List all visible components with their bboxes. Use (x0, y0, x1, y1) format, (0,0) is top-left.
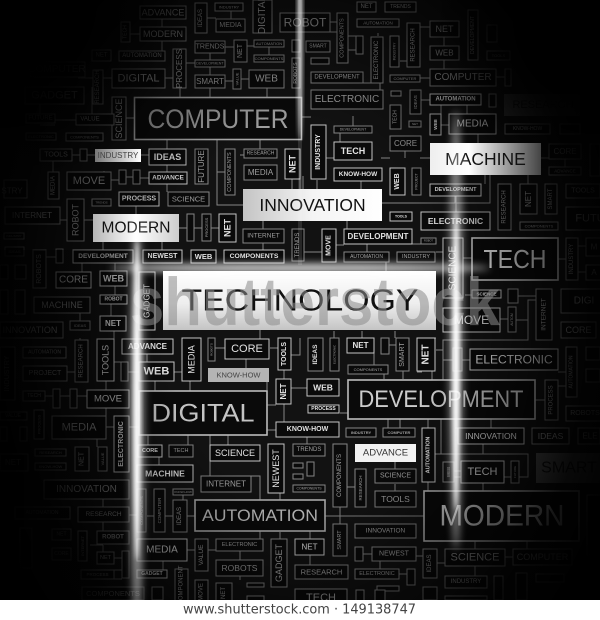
word tiles: small words: TECH (27, 393, 41, 399)
word tiles: bright bold words: WEB (103, 274, 124, 284)
word tiles: bright bold words: ADVANCE (128, 342, 168, 351)
filled box: SMART (536, 453, 600, 483)
word tiles: small words: NET (412, 122, 418, 126)
heading box: TECH: TECH (484, 244, 546, 274)
word tiles: small words: TECH (306, 592, 336, 604)
word tiles: small words: NET (5, 458, 21, 467)
word tiles: bright bold words: MEDIA (457, 118, 489, 130)
word tiles: bright bold words: WEB (195, 252, 213, 261)
word tiles: small words: ELECTRONIC (359, 571, 395, 577)
word tiles: small words: AUTOM (510, 313, 514, 326)
word tiles: small words: COMPUTER (434, 72, 492, 83)
highlighted tile: INDUSTRY (95, 149, 141, 162)
word tiles: small words: RESEARCH (502, 190, 508, 224)
word tiles: small words: ROBOT (70, 204, 80, 236)
word tiles: bright bold words: NET (222, 218, 232, 237)
light streak: center top (298, 0, 302, 265)
heading box: AUTOMATION (195, 500, 325, 531)
word tiles: small words: ROBOTS (570, 410, 600, 417)
word tiles: bright bold words: AUTOMATION (435, 96, 476, 102)
word tiles: bright bold words: MOVE (326, 235, 332, 256)
word tiles: small words: NET (436, 24, 454, 34)
word tiles: small words: AUTOMATION (568, 355, 574, 388)
word tiles: small words: RESEARCH (85, 511, 122, 518)
word tiles: bright bold words: MEDIA (146, 544, 178, 556)
heading box: COMPUTER: COMPUTER (148, 104, 288, 134)
word tiles: small words: INNOVATION (3, 325, 57, 335)
word tiles: bright bold words: DEVELOPMENT (78, 253, 128, 260)
word tiles: small words: MEDIA (62, 422, 97, 434)
word tiles: small words: FUTURE (28, 116, 53, 122)
word tiles: bright bold words: NET (302, 542, 318, 552)
word tiles: small words: INDUSTRY (4, 355, 11, 391)
word tiles: small words: IDEAS (198, 9, 204, 27)
word tiles: small words: A (591, 268, 597, 277)
word tiles: small words: SCIENCE (451, 552, 499, 564)
word tiles: small words: CORE (54, 551, 69, 557)
word tiles: small words: AUTOMATION (256, 41, 282, 46)
word tiles: small words: RESEARCH (358, 475, 363, 501)
word tiles: bright bold words: NEWEST (148, 253, 178, 260)
word tiles: small words: KNOW-HOW (39, 464, 62, 469)
word tiles: small words: PROJECT (29, 370, 62, 377)
word tiles: small words: SMART (337, 530, 343, 550)
word tiles: small words: ADVANCE (554, 168, 576, 174)
word tiles: small words: NET (100, 555, 112, 561)
word tiles: small words: VALUE (5, 413, 22, 419)
word tiles: bright bold words: TECH (341, 146, 365, 156)
word tiles: small words: NET (78, 451, 86, 466)
word tiles: bright bold words: TECH (468, 466, 498, 478)
word tiles: small words: COMPUTER (388, 430, 411, 435)
word tiles: small words: COMPONENTS (139, 496, 144, 525)
word tiles: bright bold words: DEVELOPMENT (435, 187, 477, 193)
word tiles: small words: ROBOT (284, 16, 327, 30)
word tiles: small words: SCIENCE (172, 194, 205, 204)
glow above title tile (110, 264, 490, 272)
word tiles: small words: ROBOTS (210, 343, 214, 356)
word tiles: small words: ADVANCE (142, 8, 184, 18)
word tiles: bright bold words: AUTOMATION (426, 437, 432, 473)
word tiles: small words: VALUE (100, 452, 105, 465)
highlighted tile: KNOW-HOW: KNOW-HOW (216, 370, 261, 380)
stock id caption: www.shutterstock.com · 149138747 (183, 602, 416, 618)
word tiles: small words: TRENDS (95, 200, 108, 204)
word tiles: bright bold words: PROCESS (311, 406, 336, 412)
word tiles: bright bold words: NET (279, 383, 288, 400)
word tiles: bright bold words: MOVE (94, 394, 122, 404)
word tiles: small words: NET (524, 191, 533, 207)
word tiles: bright bold words: SCIENCE (215, 448, 255, 458)
word tiles: small words: COMPONENTS (70, 134, 99, 140)
word tiles: bright bold words: NET (352, 341, 369, 350)
word tiles: small words: COMPONENTS (354, 367, 383, 372)
word tiles: bright bold words: ADVANCE (152, 174, 184, 182)
word tiles: small words: CORE (394, 139, 417, 148)
word tiles: small words: WEB (446, 467, 451, 477)
word tiles: small words: TECH (174, 448, 189, 454)
word tiles: small words: SCIENCE (114, 98, 124, 139)
word tiles: small words: COMPONENTS (255, 56, 284, 61)
highlighted tile: INDUSTRY: INDUSTRY (98, 151, 139, 160)
word tiles: small words: GADGET (31, 90, 78, 102)
word tiles: small words: VALUE (234, 72, 240, 85)
word tiles: small words: DIGI (574, 296, 594, 306)
word tiles: small words: INTERNET (206, 480, 246, 488)
word tiles: bright bold words: NET (105, 319, 121, 328)
heading box: DEVELOPMENT: DEVELOPMENT (358, 386, 524, 413)
word tiles: small words: IDEAS (177, 507, 183, 525)
word tiles: bright bold words: GADGET (141, 571, 163, 577)
word tiles: bright bold words: TOOLS (100, 345, 110, 375)
word tiles: small words: TOOLS (44, 152, 68, 158)
word tiles: small words: COMPONENTS (227, 152, 233, 192)
word tiles: small words: VALUE (80, 116, 100, 122)
word tiles: small words: AUTOMATION (350, 254, 383, 260)
heading box: COMPUTER (134, 98, 302, 140)
word tiles: small words: PROCESS (548, 385, 554, 415)
word tiles: small words: TRENDS (295, 233, 301, 257)
word tiles: small words: NET (96, 52, 108, 58)
word tiles: bright bold words: NEWEST (271, 449, 281, 488)
word tiles: small words: DEVELOPMENT (314, 74, 360, 80)
word tiles: small words: RESEARCH (95, 70, 101, 104)
word tiles: small words: IDEAS (427, 554, 433, 573)
word tiles: small words: SMART (196, 77, 224, 86)
word tiles: small words: COMPUTER (517, 552, 569, 562)
word tiles: bright bold words: SCIENCE (448, 245, 458, 290)
word tiles: small words: TRENDS (390, 4, 411, 10)
word tiles: bright bold words: PROCESS (122, 196, 156, 202)
word tiles: small words: INDUSTRY (402, 254, 430, 260)
word tiles: small words: RESEARCH (78, 344, 84, 378)
word tiles: small words: COMPONENTS (337, 454, 343, 497)
word tiles: bright bold words: ELECTRONIC (428, 216, 483, 226)
light streak: left (130, 220, 144, 620)
word tiles: bright bold words: KNOW-HOW (287, 426, 329, 433)
word tiles: small words: NEWEST (379, 550, 410, 558)
word tiles: bright bold words: DEVELOPMENT (348, 232, 409, 241)
word tiles: small words: MOVE (73, 175, 105, 187)
word tiles: small words: RESEARCH (301, 568, 342, 576)
word tiles: small words: COMPONENTS (525, 224, 554, 228)
word tiles: small words: PROCESS (204, 217, 209, 237)
word tiles: bright bold words: WEB (313, 382, 333, 392)
word tiles: small words: DEVELOPMENT (196, 62, 224, 66)
word tiles: small words: INDUSTRY (392, 42, 396, 60)
word tiles: bright bold words: NET (420, 344, 432, 364)
word tiles: small words: FUTURE (197, 150, 206, 183)
word tiles: small words: ELECTRONIC (315, 94, 379, 105)
word tiles: small words: IDEAS (538, 431, 564, 441)
word tiles: small words: TRENDS (196, 44, 225, 50)
heading box: DEVELOPMENT (348, 380, 535, 419)
word tiles: small words: TOOLS (571, 188, 595, 194)
word tiles: bright bold words: TOOLS (395, 214, 408, 218)
word tiles: small words: DEVELOPMENT (340, 128, 367, 132)
word tiles: small words: FUTURE (513, 466, 517, 478)
word tiles: small words: COMPONENT (178, 565, 184, 604)
word tiles: bright bold words: GADGET (142, 284, 152, 318)
word tiles: small words: PROCESS (86, 572, 109, 577)
heading box: TECH (472, 238, 558, 280)
word tiles: small words: RESEARCH (410, 28, 416, 62)
word tiles: bright bold words: COMPONENTS (230, 253, 279, 260)
word tiles: small words: ROBOTS (222, 563, 258, 573)
word tiles: small words: PROCESS (36, 414, 42, 434)
word tiles: small words: IDEAS (74, 323, 86, 328)
word tiles: small words: ELE (582, 432, 598, 440)
central title tile: TECHNOLOGY (163, 271, 436, 330)
word tiles: bright bold words: ELECTRONIC (118, 421, 125, 467)
word tiles: small words: IDEAS (312, 344, 319, 364)
word tiles: bright bold words: MOVE (454, 313, 489, 327)
highlighted tile: INNOVATION: INNOVATION (259, 195, 366, 215)
word tiles: small words: COMPUTER (28, 64, 86, 75)
word tiles: small words: GADGET (274, 544, 284, 582)
heading box: DIGITAL (139, 391, 267, 435)
word tiles: small words: INDUSTRY (219, 4, 240, 10)
word tiles: small words: TOOLS (492, 53, 506, 58)
word tiles: small words: INTERNET (247, 232, 280, 240)
highlighted tile: MODERN (93, 214, 179, 242)
word tiles: small words: VALUE (198, 544, 205, 565)
word tiles: bright bold words (56, 94, 558, 578)
word tiles: small words: TOOLS (381, 494, 410, 504)
word tiles: bright bold words: IDEAS (154, 152, 181, 162)
highlighted tile: ADVANCE: ADVANCE (363, 448, 408, 458)
watermark: shutterstock: shutterstock (130, 264, 500, 340)
central title tile: TECHNOLOGY: TECHNOLOGY (182, 282, 418, 318)
word tiles: small words: NET (360, 4, 373, 10)
word tiles: small words: MEDIA (50, 176, 56, 195)
word tiles: small words: KNOW-HOW (174, 490, 192, 494)
word tiles: small words: INNOVATION (56, 484, 117, 495)
word tiles: small words: MACHINE (41, 300, 83, 310)
word tiles: small words: COMPONENTS (340, 18, 346, 58)
word tiles: small words: MEDIA (219, 22, 242, 29)
left shading (0, 250, 135, 600)
bottom caption strip (0, 600, 600, 620)
word tiles: small words: M (591, 242, 598, 252)
heading box: MODERN (lower right) (424, 491, 579, 541)
word tiles: small words: INDUSTRY (6, 234, 22, 238)
word tiles: small words: SMART (548, 188, 554, 209)
word tiles: small words: INDUSTRY (351, 430, 371, 435)
word tiles: bright bold words: ROBOT (104, 296, 123, 302)
word tiles: small words: INTERNET (80, 535, 85, 556)
word tiles: small words: MOVE (198, 583, 204, 601)
word tiles: small words: ROBOT (102, 534, 124, 540)
heading box: AUTOMATION: AUTOMATION (202, 506, 318, 525)
heading box: DIGITAL: DIGITAL (152, 400, 255, 428)
word tiles: small words: AUTOMATION (363, 20, 393, 26)
word tiles: bright bold words: TOOLS (281, 342, 288, 366)
word tiles: small words: ROBOTS (36, 254, 43, 284)
word tiles: small words: TECH (122, 25, 128, 39)
word tiles: small words: NET (221, 587, 227, 599)
word tiles: bright bold words: KNOW-HOW (339, 171, 378, 178)
word tiles: small words: AUTOMATION (26, 510, 59, 516)
word tiles: small words: STRY (1, 186, 23, 196)
word tiles: small words: MODERN (143, 29, 183, 39)
word tiles: small words: ELECTRONIC (332, 344, 336, 364)
light streak: right (449, 110, 463, 550)
filled box: RESEARCH: RESEARCH (512, 99, 574, 111)
word tiles: small words: COMPUTER (157, 497, 162, 523)
highlighted tile: KNOW-HOW (208, 368, 269, 382)
word tiles: small words: SMART (399, 342, 406, 367)
word tiles: small words: PROJECT (414, 172, 418, 190)
word tiles: small words: CORE (565, 325, 592, 335)
word tiles: small words: INDUSTRY (451, 579, 481, 585)
filled box: SMART: SMART (541, 460, 597, 476)
word tiles: small words: INDUSTRY (569, 244, 575, 274)
highlighted tile: INNOVATION (243, 189, 382, 221)
word tiles: small words: COMPONENTS (86, 589, 140, 598)
highlighted tile: MODERN: MODERN (102, 220, 170, 236)
word tiles: small words: DEVELOPMENT (470, 16, 476, 54)
word tiles: small words: ROBOTS (293, 62, 299, 84)
word tiles: bright bold words: CORE (59, 274, 88, 286)
word tiles: bright bold words: MACHINE (145, 468, 185, 478)
word tiles: small words: NET (56, 532, 66, 538)
heading box: MODERN (lower right): MODERN (440, 500, 564, 532)
word tiles: small words: WEB (435, 48, 454, 58)
word tiles: small words: NET (237, 43, 244, 58)
word tiles: bright bold words: INNOVATION (465, 431, 517, 441)
word tiles: small words: TRENDS (297, 447, 321, 453)
word tiles: small words: PROCESS (175, 49, 184, 88)
word tiles: small words: INTERNET (12, 211, 52, 220)
word tiles: small words: CORE (553, 147, 577, 156)
word tiles: small words: KNOW-HOW (513, 126, 542, 132)
word tiles: bright bold words: WEB (394, 173, 401, 190)
word tiles: small words: WEB (255, 74, 278, 84)
word tiles: bright bold words: CORE (231, 343, 263, 355)
word tiles: small words: INTERNET (540, 298, 548, 331)
word tiles: bright bold words: CORE (142, 448, 158, 454)
word tiles: small words: MEDIA (248, 168, 274, 177)
word tiles: bright bold words: NET (288, 154, 298, 173)
word tiles: small words: ROBOT (424, 240, 433, 242)
word tiles: bright bold words: ELECTRONIC (475, 352, 553, 366)
word tiles: small words: COMPUTER (394, 76, 417, 81)
word tiles: small words: DIGITAL (118, 72, 159, 84)
highlighted tile: ADVANCE (355, 444, 416, 462)
filled box: RESEARCH (504, 94, 580, 116)
word tiles: small words: SCIENCE (380, 472, 411, 480)
top-left corner shading (0, 0, 190, 190)
word tiles: small words: SMART (309, 44, 327, 50)
word tiles: small words: AUTOMATION (122, 53, 162, 59)
word tiles: small words: INNOVATION (366, 528, 406, 534)
word tiles: small words: IDEAS (8, 249, 21, 254)
top-right corner shading (430, 0, 600, 190)
word tiles: bright bold words: SCIENCE (476, 292, 497, 296)
word tiles: bright bold words: INDUSTRY (315, 134, 322, 170)
word tiles: small words: ELECTRONIC (374, 40, 380, 79)
word tiles: bright bold words: WEB (144, 366, 169, 378)
word tiles: small words: AUTOMATION (28, 350, 61, 356)
word tiles: small words: ELECTRONIC (28, 134, 54, 139)
word tiles: bright bold words: WEB (433, 119, 438, 130)
word tiles: small words: ELECTRONIC (222, 542, 257, 548)
word tiles: small words: RESEARCH (39, 450, 62, 455)
highlighted tile: MACHINE (430, 143, 541, 175)
highlighted tile: MACHINE: MACHINE (445, 149, 526, 169)
word tiles: small words: RESEARCH (247, 150, 275, 156)
word tiles: bright bold words: MEDIA (186, 345, 196, 374)
word tiles: small words: IDEAS (413, 95, 418, 109)
word tiles: small words: COMPONENTS (296, 486, 322, 490)
word tiles: small words: TECH (392, 110, 398, 124)
